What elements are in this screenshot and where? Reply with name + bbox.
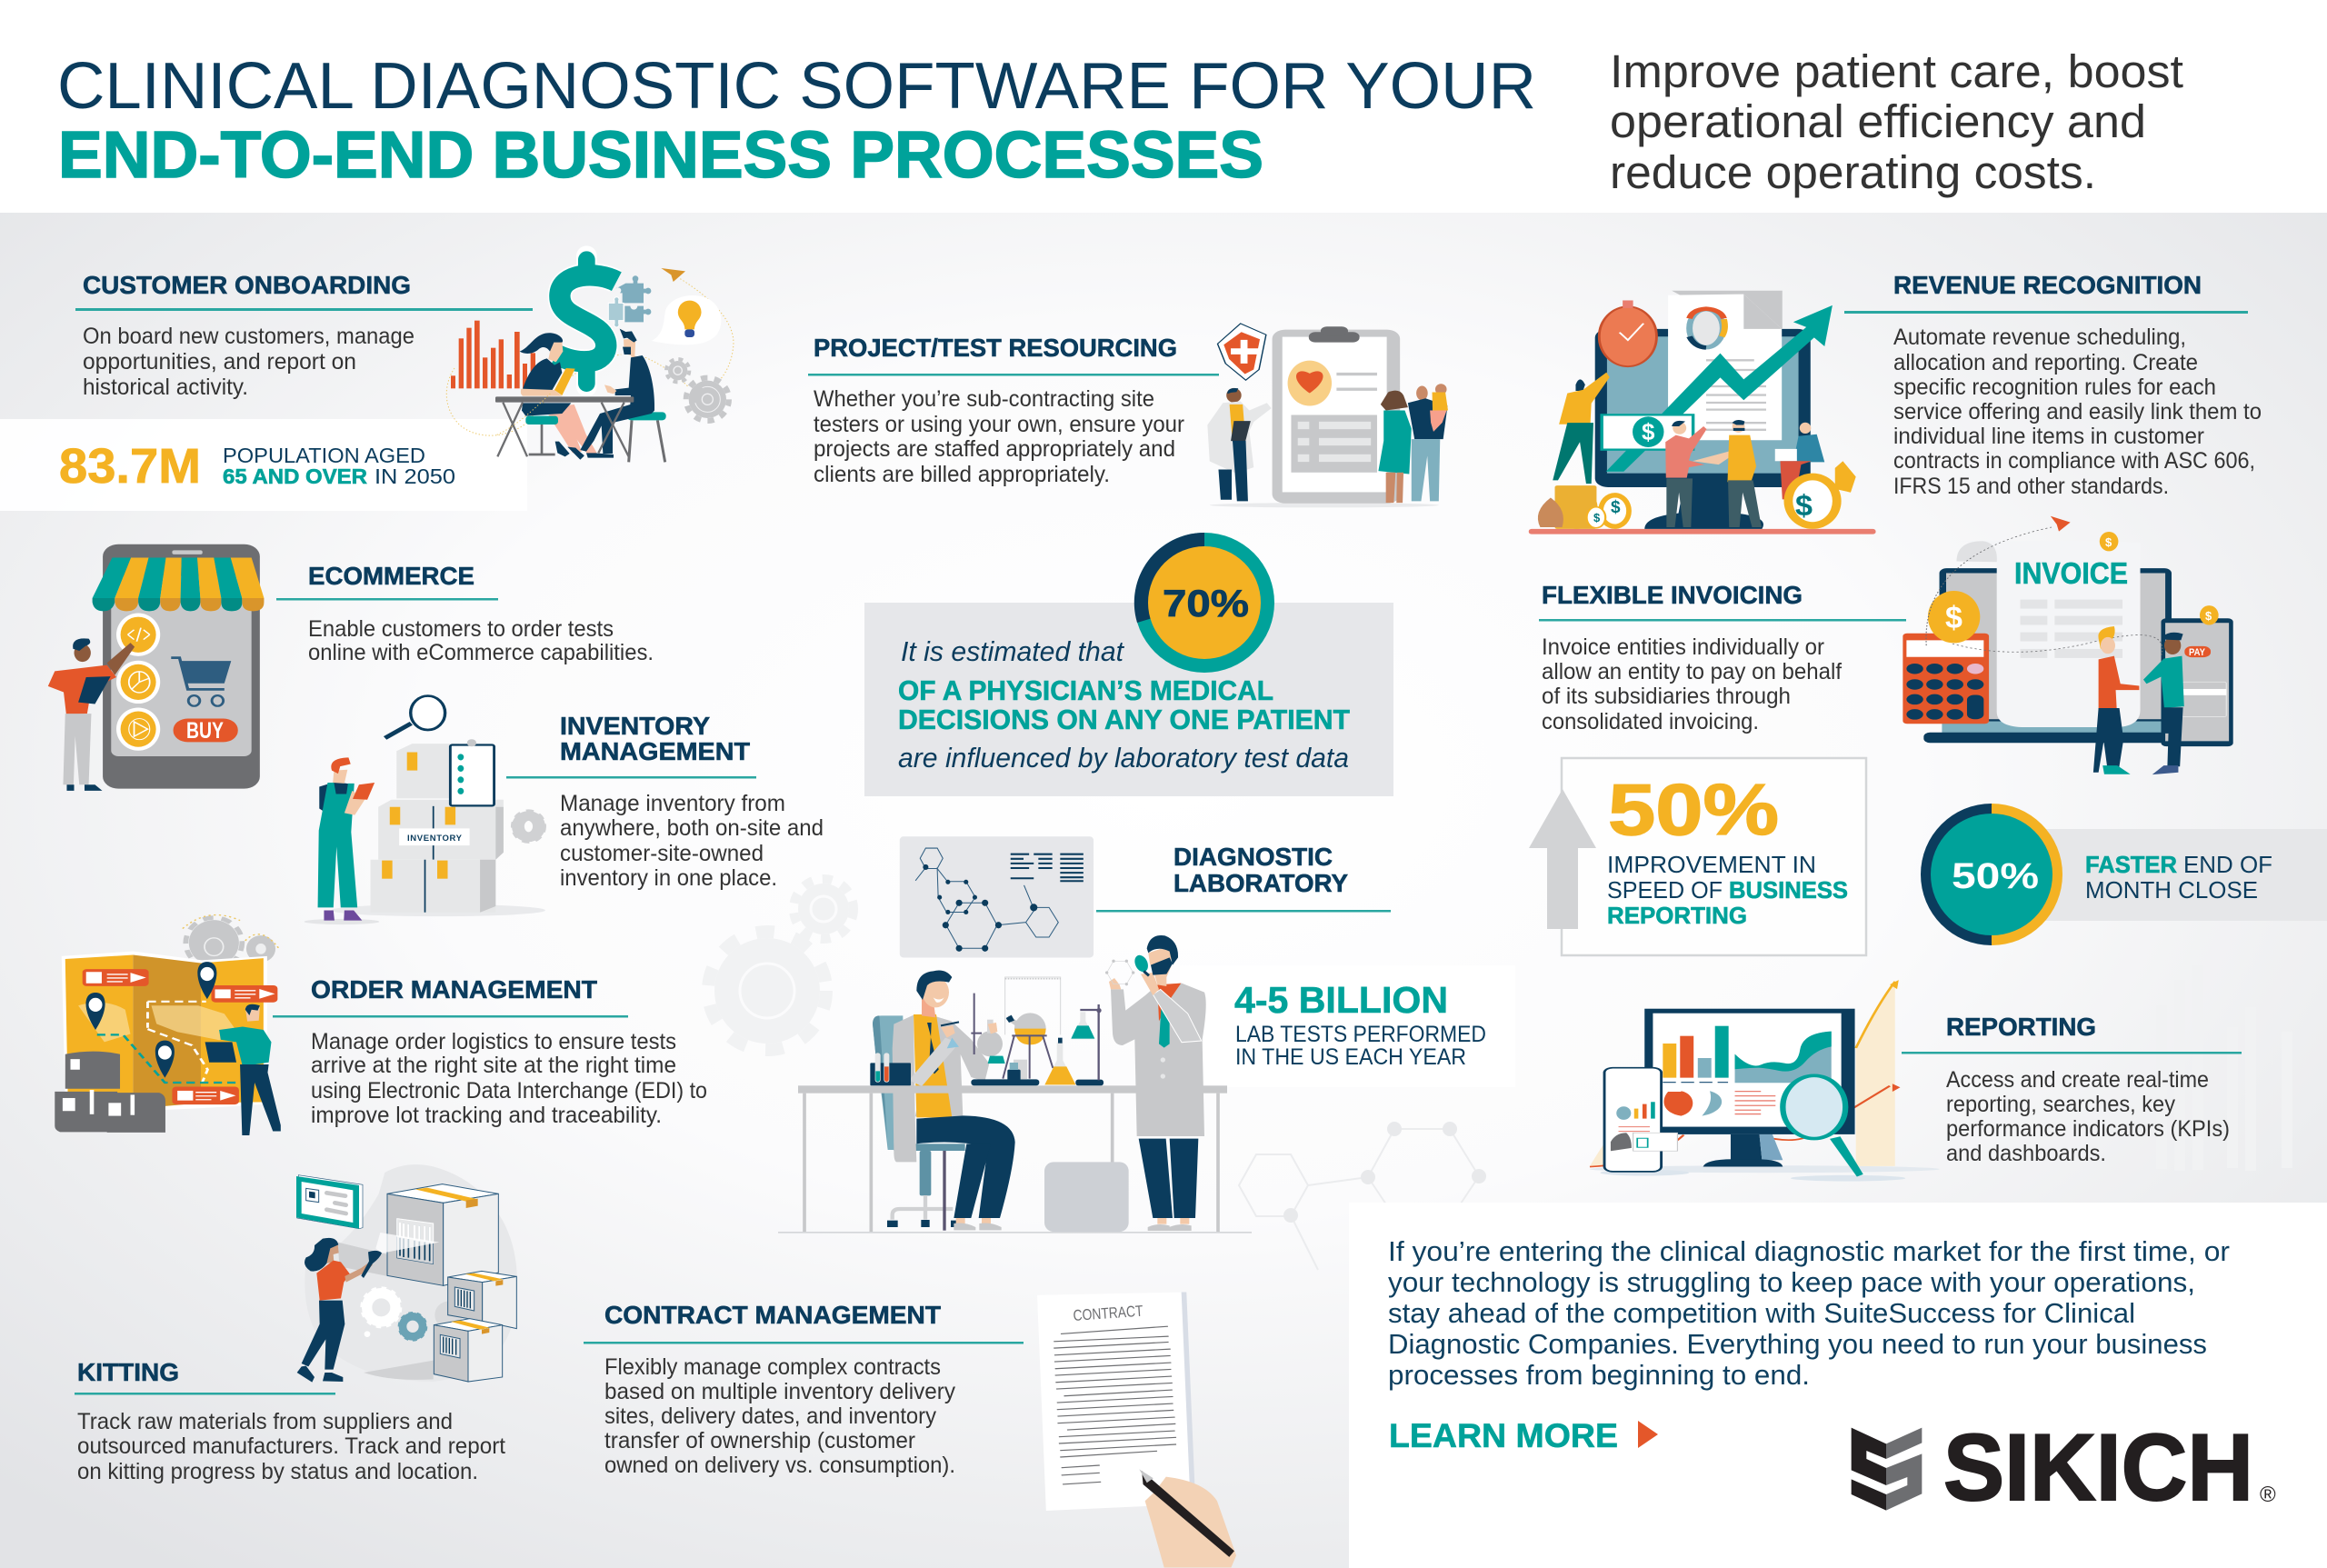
panel: customer onboarding bbox=[75, 271, 533, 400]
panel: reporting bbox=[1902, 1013, 2242, 1166]
text: flexible invoicing bbox=[1542, 634, 1842, 734]
text: call to action: processes from beginning to end. bbox=[1388, 1359, 1810, 1391]
callout: 70 percent statistic: It is estimated that bbox=[901, 635, 1124, 667]
illustration: ecommerce phone storefront bbox=[48, 544, 264, 791]
text: contract management: Flexibly manage complex contracts bbox=[604, 1354, 941, 1380]
text: customer onboarding: On board new customers, manage bbox=[83, 324, 414, 349]
text: flexible invoicing: consolidated invoicing. bbox=[1542, 709, 1759, 734]
text: contract management: owned on delivery vs. consumption). bbox=[604, 1453, 955, 1478]
illustration: inventory boxes bbox=[305, 696, 545, 924]
icon: molecule panel bbox=[900, 836, 1094, 957]
icon: light bulb bbox=[678, 301, 702, 337]
text: kitting: on kitting progress by status and location. bbox=[77, 1459, 478, 1484]
text: inventory label: INVENTORY bbox=[407, 834, 463, 844]
panel: order management bbox=[273, 975, 707, 1128]
stat: lab tests per year bbox=[1180, 965, 1515, 1087]
panel: kitting bbox=[75, 1358, 505, 1484]
title bbox=[57, 50, 1536, 192]
text: revenue recognition: specific recognition rules for each bbox=[1893, 375, 2216, 400]
icon: dollar coins: $ bbox=[1945, 601, 1962, 635]
text: ecommerce: Enable customers to order tests bbox=[308, 616, 614, 642]
stat: lab tests per year: IN THE US EACH YEAR bbox=[1235, 1044, 1466, 1070]
icon: shield mark bbox=[1852, 1428, 1922, 1511]
title: CLINICAL DIAGNOSTIC SOFTWARE FOR YOUR bbox=[57, 50, 1536, 123]
text: customer onboarding bbox=[83, 324, 414, 400]
stat: 50 percent faster month close: END OF bbox=[2183, 851, 2272, 878]
text: inventory management: anywhere, both on-site and bbox=[560, 815, 824, 841]
icon: dollar coins bbox=[1945, 535, 2212, 635]
text: revenue recognition: allocation and reporting. Create bbox=[1893, 350, 2198, 375]
text: inventory management: Manage inventory from bbox=[560, 791, 785, 816]
stat: lab tests per year: LAB TESTS PERFORMED bbox=[1235, 1022, 1486, 1047]
chart: 50 percent donut: 50% bbox=[1952, 856, 2039, 896]
stat: population aged 65 and over: POPULATION AGED bbox=[223, 444, 425, 467]
text: reporting: and dashboards. bbox=[1946, 1141, 2106, 1166]
text: inventory management: inventory in one place. bbox=[560, 865, 777, 891]
icon: dollar symbols: $ bbox=[1795, 489, 1813, 522]
stat: 50 percent improvement in reporting speed: IMPROVEMENT IN bbox=[1607, 851, 1816, 878]
small box bottom bbox=[434, 1319, 503, 1382]
stat: population aged 65 and over: 65 AND OVER bbox=[223, 464, 367, 488]
text: reporting: reporting, searches, key bbox=[1946, 1092, 2175, 1117]
text: order management bbox=[311, 1029, 707, 1128]
text: buy button: BUY bbox=[186, 718, 224, 744]
stat: 50 percent faster month close: MONTH CLOSE bbox=[2085, 876, 2258, 904]
icon: dollar symbols: $ bbox=[1642, 418, 1655, 445]
stat: population aged 65 and over: 83.7M bbox=[59, 439, 201, 494]
stat: lab tests per year: 4-5 BILLION bbox=[1234, 979, 1448, 1021]
icon: gears bbox=[666, 359, 729, 421]
heading: diagnostic laboratory bbox=[1173, 843, 1348, 897]
chart: 70 percent donut bbox=[1134, 533, 1274, 673]
illustration: laboratory scientists bbox=[778, 935, 1252, 1233]
illustration: kitting warehouse scan bbox=[296, 1164, 517, 1383]
text: project/test resourcing bbox=[814, 386, 1184, 487]
illustration: invoice payment bbox=[1903, 516, 2233, 774]
heading: order management: ORDER MANAGEMENT bbox=[311, 975, 597, 1004]
heading: inventory management: INVENTORY bbox=[560, 712, 710, 740]
lab equipment bbox=[870, 977, 1104, 1085]
panel: call to action bbox=[1349, 1203, 2327, 1568]
icon: gears bbox=[363, 1289, 426, 1340]
panel: revenue recognition bbox=[1844, 271, 2262, 499]
panel: ecommerce bbox=[276, 562, 654, 665]
man bbox=[567, 329, 666, 462]
heading: reporting: REPORTING bbox=[1946, 1013, 2096, 1041]
text: order management: improve lot tracking and traceability. bbox=[311, 1103, 662, 1128]
text: order management: arrive at the right site at the right time bbox=[311, 1053, 676, 1078]
standing scientist bbox=[1105, 935, 1206, 1231]
heading: kitting: KITTING bbox=[77, 1358, 179, 1386]
callout: 70 percent statistic: DECISIONS ON ANY ONE PATIENT bbox=[898, 704, 1350, 735]
text: customer onboarding: historical activity. bbox=[83, 375, 248, 400]
woman bbox=[520, 333, 597, 460]
text: customer onboarding: opportunities, and report on bbox=[83, 349, 356, 375]
woman with scanner bbox=[297, 1238, 382, 1383]
icon: dollar sign bbox=[556, 256, 616, 386]
panel: project/test resourcing bbox=[808, 334, 1219, 487]
button: learn more: LEARN MORE bbox=[1389, 1417, 1618, 1454]
text: ecommerce bbox=[308, 616, 654, 665]
stat: 50 percent improvement in reporting speed: 50% bbox=[1608, 769, 1779, 850]
small box top bbox=[448, 1271, 516, 1329]
text: contract management: transfer of ownership (customer bbox=[604, 1428, 915, 1453]
text: call to action: your technology is struggling to keep pace with your operations, bbox=[1388, 1266, 2195, 1298]
text: order management: using Electronic Data Interchange (EDI) to bbox=[311, 1078, 707, 1104]
text: order management: Manage order logistics to ensure tests bbox=[311, 1029, 676, 1054]
text: inventory management bbox=[560, 791, 824, 891]
chart: 70 percent donut: 70% bbox=[1163, 582, 1249, 624]
stat: population aged 65 and over: IN 2050 bbox=[375, 464, 455, 488]
heading: flexible invoicing: FLEXIBLE INVOICING bbox=[1542, 581, 1803, 609]
stat: population aged 65 and over bbox=[0, 419, 527, 511]
text: call to action: If you’re entering the clinical diagnostic market for the first time, or bbox=[1388, 1235, 2230, 1267]
panel: flexible invoicing bbox=[1539, 581, 1906, 734]
icon: dollar coins: $ bbox=[2105, 535, 2112, 549]
icon: dollar symbols: $ bbox=[1593, 511, 1601, 524]
illustration: reporting dashboard bbox=[1590, 980, 1940, 1182]
subtitle bbox=[1610, 45, 2183, 198]
icon: dollar symbols bbox=[1593, 418, 1813, 524]
text: pay button: PAY bbox=[2189, 647, 2206, 658]
stat: 50 percent faster month close: FASTER bbox=[2085, 851, 2177, 878]
callout: 70 percent statistic bbox=[864, 533, 1393, 796]
text: project/test resourcing: projects are staffed appropriately and bbox=[814, 436, 1175, 462]
heading: diagnostic laboratory: LABORATORY bbox=[1173, 869, 1348, 897]
heading: inventory management: MANAGEMENT bbox=[560, 737, 750, 765]
text: contract management: sites, delivery dates, and inventory bbox=[604, 1403, 936, 1429]
stat: 50 percent improvement in reporting speed: REPORTING bbox=[1607, 902, 1747, 929]
icon: dollar coins: $ bbox=[2205, 609, 2212, 623]
title: END-TO-END BUSINESS PROCESSES bbox=[58, 119, 1263, 192]
stat: 50 percent improvement in reporting speed bbox=[1529, 758, 1866, 955]
stat: 50 percent improvement in reporting speed: BUSINESS bbox=[1729, 876, 1848, 904]
heading: customer onboarding: CUSTOMER ONBOARDING bbox=[83, 271, 411, 299]
text: revenue recognition: IFRS 15 and other standards. bbox=[1893, 474, 2169, 499]
chart: 50 percent donut bbox=[1921, 804, 2062, 945]
text: call to action bbox=[1388, 1235, 2230, 1391]
panel: inventory management bbox=[506, 712, 824, 891]
logo: sikich: ® bbox=[2260, 1483, 2276, 1507]
text: project/test resourcing: testers or using your own, ensure your bbox=[814, 412, 1184, 437]
text: kitting bbox=[77, 1409, 505, 1484]
stat: 50 percent faster month close bbox=[1921, 804, 2327, 945]
callout: 70 percent statistic: are influenced by laboratory test data bbox=[898, 742, 1349, 774]
text: project/test resourcing: Whether you’re sub-contracting site bbox=[814, 386, 1154, 412]
text: call to action: Diagnostic Companies. Everything you need to run your business bbox=[1388, 1328, 2207, 1360]
text: kitting: outsourced manufacturers. Track and report bbox=[77, 1433, 505, 1459]
illustration: customer onboarding team bbox=[446, 256, 734, 462]
heading: diagnostic laboratory: DIAGNOSTIC bbox=[1173, 843, 1333, 871]
text: flexible invoicing: allow an entity to pay on behalf bbox=[1542, 659, 1842, 684]
large box bbox=[387, 1184, 498, 1285]
text: invoice document title: INVOICE bbox=[2014, 556, 2128, 590]
subtitle: Improve patient care, boost bbox=[1610, 45, 2183, 97]
text: inventory management: customer-site-owned bbox=[560, 841, 764, 866]
illustration: doctor, clipboard and family bbox=[1207, 324, 1448, 507]
text: call to action: stay ahead of the competition with SuiteSuccess for Clinical bbox=[1388, 1297, 2135, 1329]
text: revenue recognition bbox=[1893, 325, 2262, 499]
illustration: order logistics map bbox=[55, 915, 281, 1135]
seated scientist and chair bbox=[873, 970, 1015, 1231]
icon: dollar symbols: $ bbox=[1611, 498, 1621, 517]
text: ecommerce: online with eCommerce capabilities. bbox=[308, 640, 654, 665]
text: contract document title: CONTRACT bbox=[1073, 1303, 1144, 1324]
logo: sikich: SIKICH bbox=[1943, 1415, 2253, 1521]
callout: 70 percent statistic: OF A PHYSICIAN’S MEDICAL bbox=[898, 674, 1273, 706]
text: revenue recognition: contracts in compliance with ASC 606, bbox=[1893, 448, 2255, 474]
text: reporting: Access and create real-time bbox=[1946, 1067, 2209, 1093]
illustration: contract document and pen bbox=[1037, 1293, 1236, 1568]
subtitle: reduce operating costs. bbox=[1610, 146, 2096, 198]
illustration: revenue recognition growth bbox=[1529, 291, 1876, 534]
subtitle: operational efficiency and bbox=[1610, 95, 2146, 147]
text: contract management bbox=[604, 1354, 955, 1478]
text: revenue recognition: service offering and easily link them to bbox=[1893, 399, 2262, 424]
stat: 50 percent improvement in reporting speed: SPEED OF bbox=[1607, 876, 1723, 904]
text: kitting: Track raw materials from suppliers and bbox=[77, 1409, 453, 1434]
text: contract management: based on multiple inventory delivery bbox=[604, 1379, 955, 1404]
text: revenue recognition: individual line items in customer bbox=[1893, 424, 2204, 449]
heading: contract management: CONTRACT MANAGEMENT bbox=[604, 1301, 941, 1329]
heading: revenue recognition: REVENUE RECOGNITION bbox=[1893, 271, 2202, 299]
icon: puzzle pieces bbox=[608, 275, 651, 327]
icon: id card bbox=[296, 1175, 363, 1229]
text: revenue recognition: Automate revenue scheduling, bbox=[1893, 325, 2186, 350]
text: flexible invoicing: Invoice entities individually or bbox=[1542, 634, 1824, 660]
heading: ecommerce: ECOMMERCE bbox=[308, 562, 474, 590]
text: reporting bbox=[1946, 1067, 2230, 1166]
icon: up arrow bbox=[1529, 789, 1596, 929]
text: project/test resourcing: clients are billed appropriately. bbox=[814, 462, 1110, 487]
heading: project/test resourcing: PROJECT/TEST RESOURCING bbox=[814, 334, 1177, 362]
panel: contract management bbox=[584, 1301, 1024, 1478]
panel: diagnostic laboratory bbox=[900, 836, 1391, 957]
text: flexible invoicing: of its subsidiaries through bbox=[1542, 684, 1791, 709]
heading: inventory management bbox=[560, 712, 750, 765]
text: reporting: performance indicators (KPIs) bbox=[1946, 1116, 2230, 1142]
